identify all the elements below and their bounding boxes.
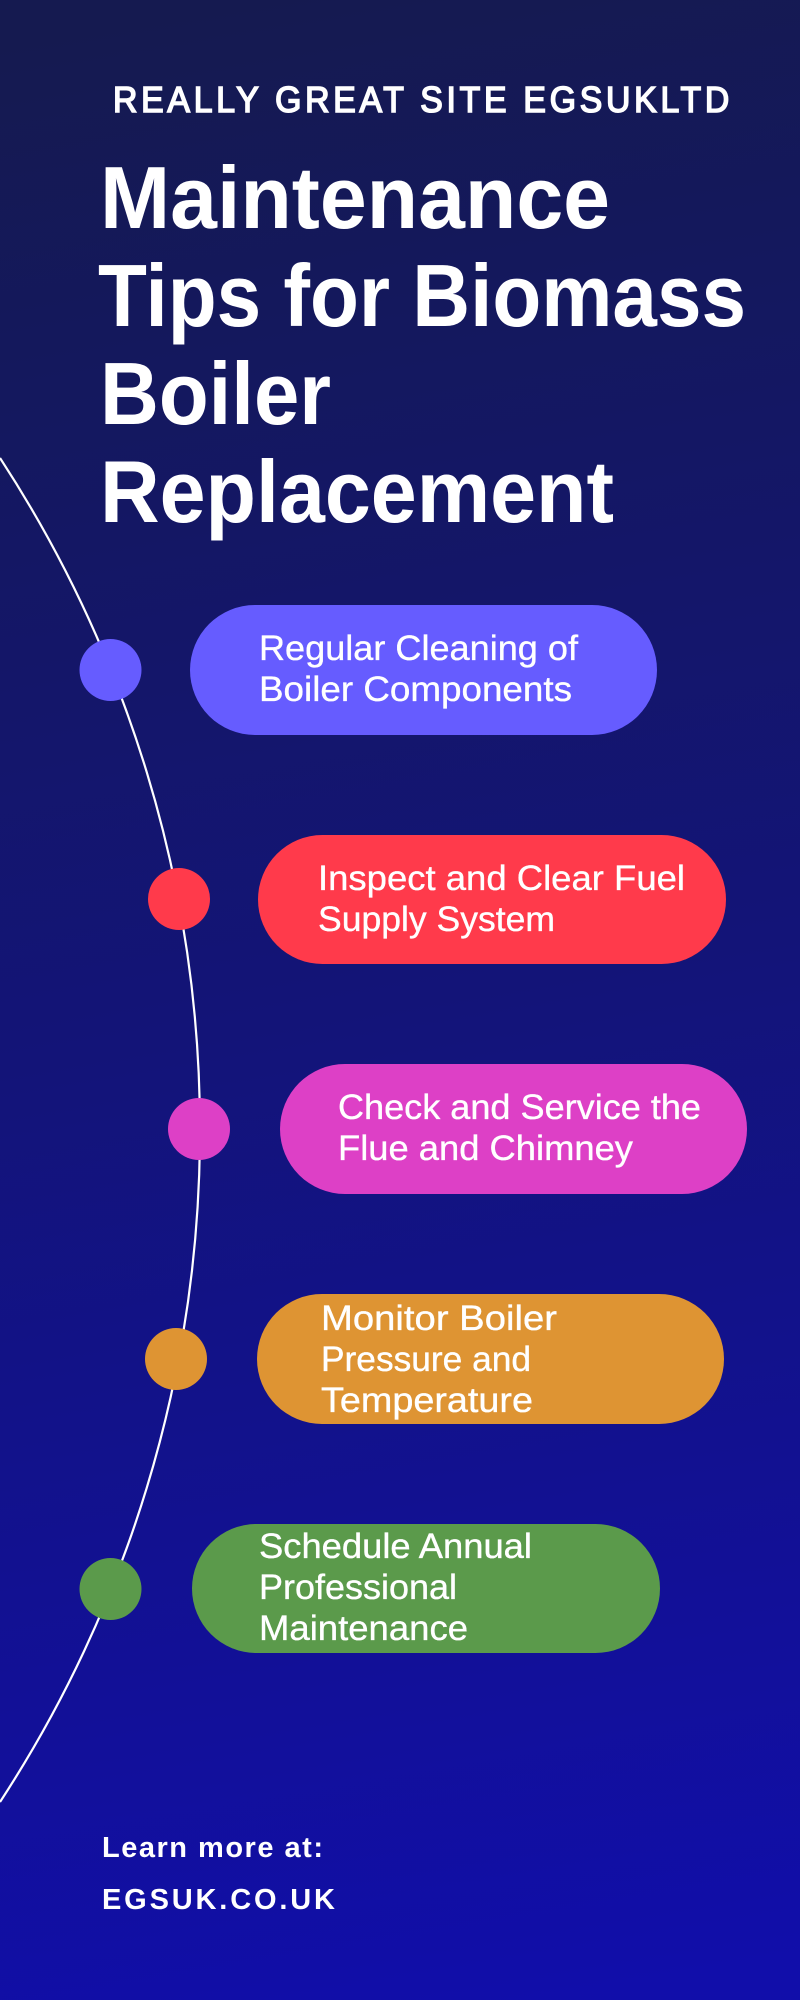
step 4 pill: Temperature (321, 1381, 533, 1420)
step 2 dot (148, 868, 210, 930)
step 5 dot (80, 1558, 142, 1620)
footer link: Learn more at: (102, 1832, 323, 1864)
step 5 pill: Schedule Annual (259, 1527, 532, 1566)
title (98, 148, 746, 541)
title: Boiler (100, 344, 331, 443)
step 4 pill (257, 1294, 724, 1424)
step 1 dot (80, 639, 142, 701)
step 2 pill: Inspect and Clear Fuel (318, 859, 685, 898)
step 2 pill (258, 835, 726, 964)
title: Maintenance (100, 148, 610, 247)
timeline arc (0, 458, 200, 1802)
footer link: EGSUK.CO.UK (102, 1884, 335, 1916)
step 2 pill: Supply System (318, 900, 555, 939)
title: Tips for Biomass (98, 246, 746, 345)
step 5 pill: Professional (259, 1568, 457, 1607)
step 3 pill: Check and Service the (338, 1088, 701, 1127)
step 4 pill: Monitor Boiler (321, 1299, 557, 1338)
title: Replacement (100, 442, 614, 541)
step 3 pill: Flue and Chimney (338, 1129, 634, 1168)
step 1 pill: Boiler Components (259, 670, 572, 709)
step 3 pill (280, 1064, 747, 1194)
step 5 pill: Maintenance (259, 1609, 468, 1648)
step 5 pill (192, 1524, 660, 1653)
site name: REALLY GREAT SITE EGSUKLTD (113, 79, 733, 120)
step 1 pill (190, 605, 657, 735)
footer link (102, 1832, 335, 1916)
step 3 dot (168, 1098, 230, 1160)
step 4 pill: Pressure and (321, 1340, 531, 1379)
step 4 dot (145, 1328, 207, 1390)
step 1 pill: Regular Cleaning of (259, 629, 578, 668)
